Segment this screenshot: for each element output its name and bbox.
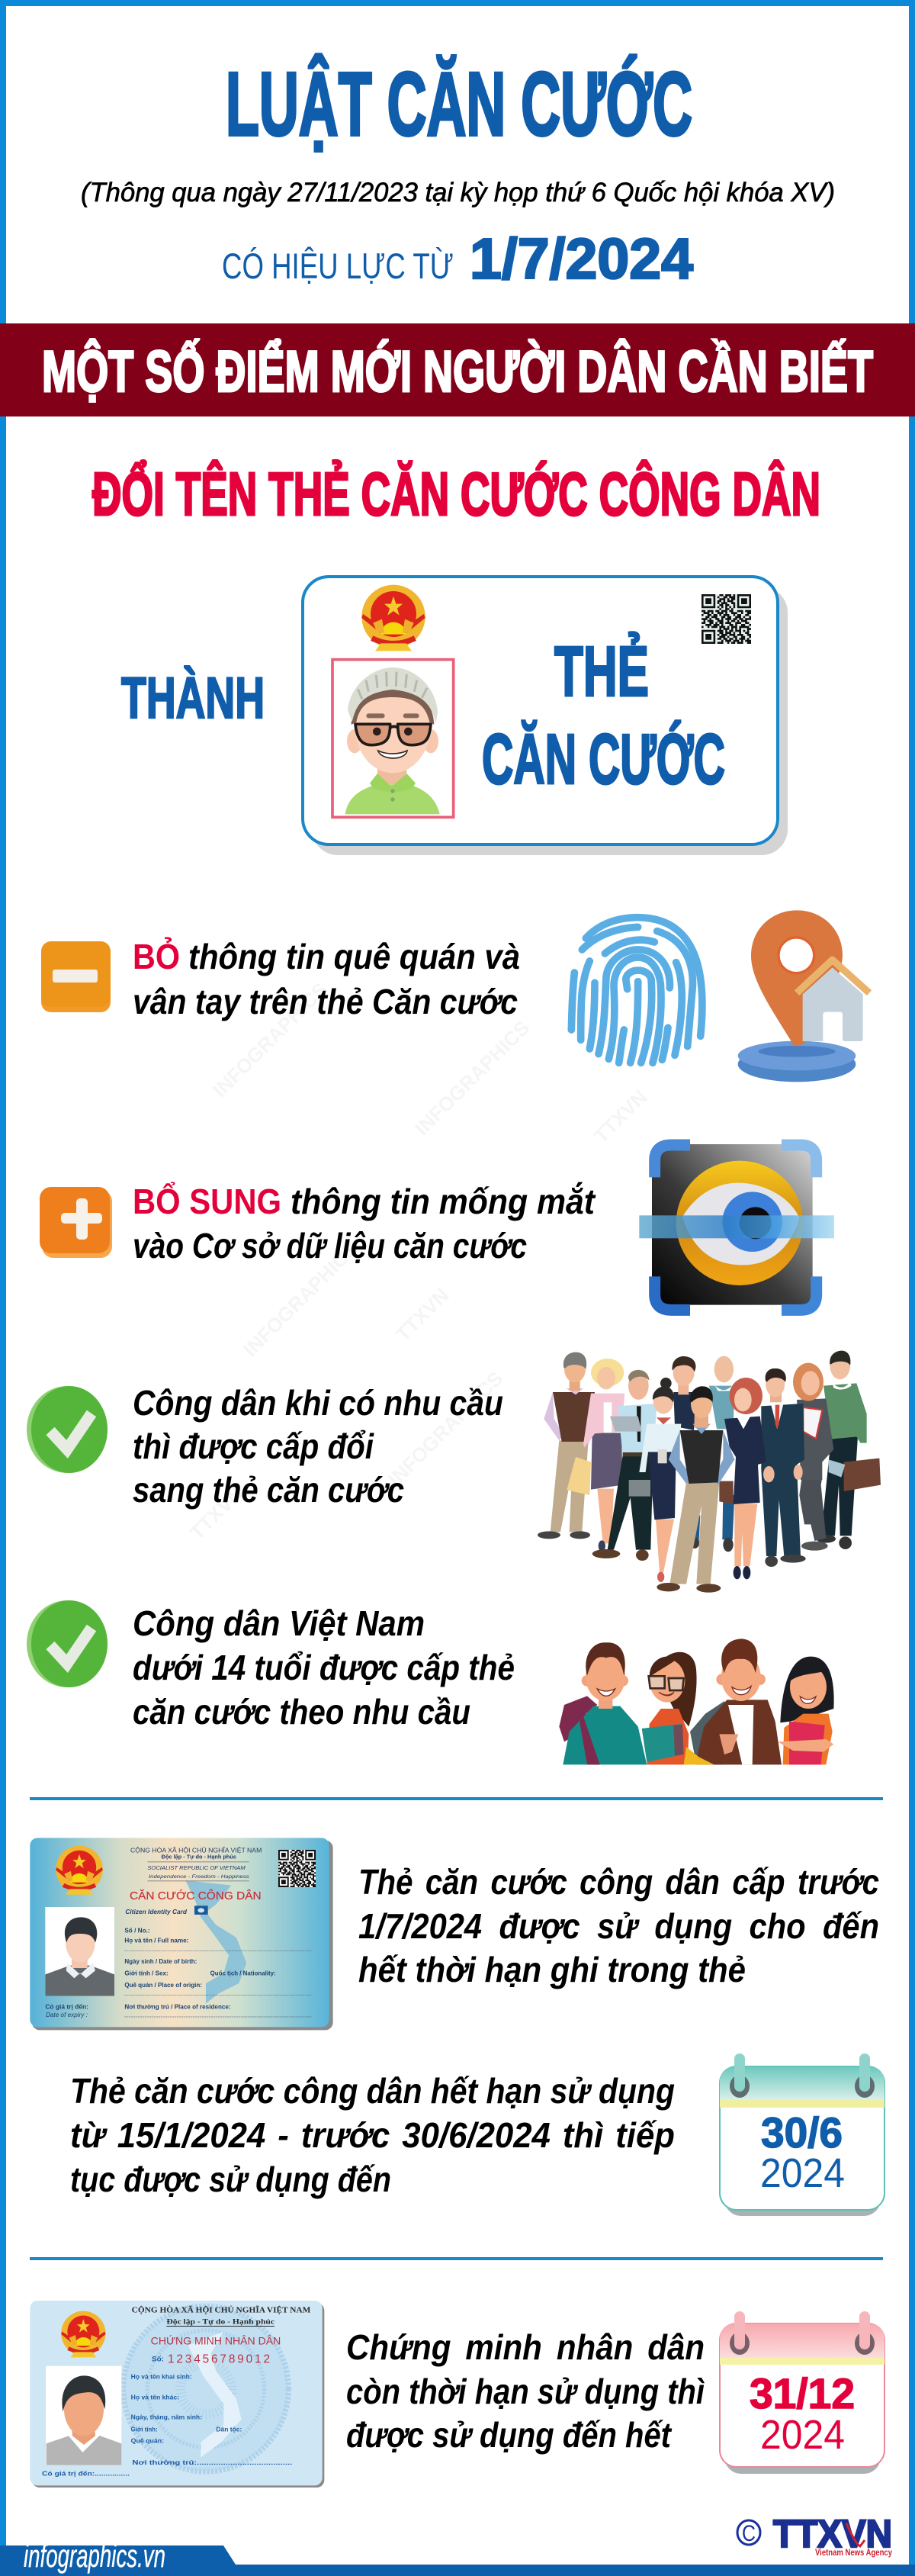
text: thông tin quê quán và: [188, 937, 520, 976]
image: people's ID card: [30, 2301, 324, 2488]
image: citizen ID card: Quốc tịch / Nationality:: [210, 1970, 276, 1976]
icon: fingerprint: [571, 918, 702, 1063]
icon: calendar 31/12/2024: [720, 2311, 884, 2474]
text: TTXVN: [185, 1482, 248, 1544]
student: girl with book: [778, 1657, 834, 1764]
footer: infographics.vn: [24, 2538, 165, 2574]
text: hết thời hạn ghi trong thẻ: [358, 1950, 746, 1989]
icon: calendar 30/6/2024: [720, 2053, 884, 2216]
text: được sử dụng đến hết: [346, 2415, 672, 2455]
icon: check: [27, 1600, 108, 1687]
logo: TTXVN: C: [742, 2521, 756, 2546]
icon: iris scan: [639, 1144, 834, 1310]
text: Chứng minh nhân dân: [346, 2327, 705, 2367]
person: suit man: [761, 1368, 806, 1567]
image: citizen ID card: Họ và tên / Full name:: [124, 1938, 188, 1944]
icon: plus: [40, 1187, 112, 1258]
text: [70, 2071, 675, 2199]
image: people's ID card: Họ và tên khai sinh:: [131, 2373, 192, 2380]
text: thông tin mống mắt: [291, 1182, 596, 1221]
footer: [0, 2538, 915, 2576]
effective date: 1/7/2024: [470, 227, 693, 291]
panel: new ID card: [303, 577, 788, 855]
image: people's ID card: Quê quán:: [131, 2438, 164, 2445]
image: citizen ID card: Ngày sinh / Date of birth:: [124, 1958, 197, 1965]
text: [133, 1603, 515, 1732]
card text: CĂN CƯỚC: [482, 719, 725, 799]
panel: citizen ID validity: [30, 1838, 879, 2030]
logo: TTXVN: [737, 2512, 892, 2558]
text: [358, 1862, 879, 1989]
text: [133, 1182, 596, 1265]
image: citizen ID card: Date of expiry :: [46, 2012, 88, 2018]
icon: QR code: [702, 594, 751, 644]
text: INFOGRAPHICS: [384, 1367, 507, 1491]
icon: national emblem: [361, 585, 425, 651]
icon: calendar 31/12/2024: 31/12: [750, 2369, 855, 2417]
icon: calendar 30/6/2024: 2024: [760, 2150, 845, 2196]
image: people's ID card: 123456789012: [168, 2353, 270, 2366]
person: orange-haired woman: [793, 1363, 845, 1551]
person: blonde woman: [583, 1359, 624, 1552]
divider: [30, 1797, 883, 1800]
image: people's ID card: Ngày, tháng, năm sinh:: [131, 2414, 202, 2421]
illustration: crowd of people: [538, 1351, 881, 1593]
student: boy with jacket: [684, 1639, 782, 1764]
label: thanh: THÀNH: [121, 666, 265, 731]
student: girl with glasses: [642, 1652, 697, 1764]
image: citizen ID card: SOCIALIST REPUBLIC OF VIETNAM: [147, 1864, 246, 1871]
item: add: [40, 1144, 834, 1310]
image: people's ID card: Dân tộc:: [216, 2426, 242, 2433]
person: woman with coffee: [629, 1378, 681, 1582]
text: INFOGRAPHICS: [208, 978, 332, 1101]
text: Công dân khi có nhu cầu: [133, 1383, 503, 1423]
image: citizen ID card: Independence - Freedom - Happiness: [149, 1874, 249, 1880]
item: children under 14: [27, 1600, 834, 1764]
person: short-haired woman: [673, 1356, 696, 1430]
person: vest man: [538, 1352, 600, 1539]
text: [346, 2327, 705, 2455]
image: citizen ID card: Nơi thường trú / Place of residence:: [124, 2003, 231, 2010]
icon: minus: [41, 941, 111, 1012]
person: man with tablet: [592, 1370, 657, 1561]
icon: calendar 31/12/2024: 2024: [760, 2412, 845, 2458]
image: citizen ID card: [30, 1838, 333, 2030]
effective date: CÓ HIỆU LỰC TỪ: [222, 246, 454, 286]
text: TTXVN: [391, 1284, 454, 1346]
text: vân tay trên thẻ Căn cước: [133, 982, 518, 1021]
card text: THẺ: [554, 632, 649, 711]
subtitle: (Thông qua ngày 27/11/2023 tại kỳ họp thứ 6 Quốc hội khóa XV): [81, 178, 835, 207]
image: citizen ID card: Có giá trị đến:: [45, 2003, 88, 2010]
panel: old ID validity: [30, 2301, 884, 2488]
person: briefcase man: [817, 1351, 881, 1549]
text: Thẻ căn cước công dân hết hạn sử dụng: [70, 2071, 675, 2111]
image: citizen ID card: Số / No.:: [124, 1927, 150, 1934]
text: còn thời hạn sử dụng thì: [346, 2372, 705, 2411]
text: tục được sử dụng đến: [70, 2160, 391, 2199]
image: people's ID card: Độc lập - Tự do - Hạnh phúc: [166, 2319, 274, 2327]
person: bald man: [689, 1356, 734, 1552]
image: citizen ID card: Giới tính / Sex:: [124, 1970, 169, 1976]
logo: TTXVN: Vietnam News Agency: [815, 2547, 892, 2558]
item: remove: [41, 910, 869, 1082]
student: boy with backpack: [559, 1642, 647, 1764]
image: citizen ID card: Citizen Identity Card: [125, 1908, 188, 1915]
text: [133, 1383, 503, 1510]
portrait: [332, 660, 454, 817]
image: people's ID card: Họ và tên khác:: [131, 2394, 179, 2401]
text: BỎ: [133, 937, 180, 976]
text: sang thẻ căn cước: [133, 1470, 404, 1510]
text: INFOGRAPHICS: [410, 1016, 534, 1140]
text: Công dân Việt Nam: [133, 1603, 425, 1643]
person: front man: [657, 1386, 734, 1593]
text: thì được cấp đổi: [133, 1426, 374, 1466]
text: từ 15/1/2024 - trước 30/6/2024 thì tiếp: [70, 2115, 675, 2155]
icon: check: [27, 1386, 108, 1473]
person: red-haired woman: [719, 1378, 766, 1579]
image: citizen ID card: CỘNG HÒA XÃ HỘI CHỦ NGHĨA VIỆT NAM: [130, 1845, 262, 1854]
card text: [482, 632, 725, 799]
image: people's ID card: Nơi thường trú:........................................: [132, 2459, 292, 2466]
image: citizen ID card: Độc lập - Tự do - Hạnh phúc: [162, 1855, 236, 1860]
icon: calendar 30/6/2024: 30/6: [761, 2108, 843, 2156]
image: people's ID card: CHỨNG MINH NHÂN DÂN: [151, 2334, 281, 2346]
image: people's ID card: Số:: [152, 2356, 164, 2363]
text: TTXVN: [589, 1085, 652, 1147]
text: INFOGRAPHICS: [239, 1237, 362, 1361]
text: [133, 937, 520, 1021]
image: people's ID card: Giới tính:: [131, 2426, 158, 2433]
item: citizens request: [27, 1351, 881, 1593]
text: vào Cơ sở dữ liệu căn cước: [133, 1226, 527, 1265]
effective date: [222, 227, 693, 291]
image: citizen ID card: CĂN CƯỚC CÔNG DÂN: [130, 1889, 262, 1902]
panel: expired cards extension: [70, 2053, 884, 2216]
text: dưới 14 tuổi được cấp thẻ: [133, 1648, 515, 1687]
divider: [30, 2257, 883, 2260]
icon: location and house: [738, 910, 869, 1082]
image: people's ID card: CỘNG HÒA XÃ HỘI CHỦ NGHĨA VIỆT NAM: [132, 2305, 311, 2315]
illustration: students: [559, 1639, 834, 1764]
logo: TTXVN: TTXVN: [773, 2512, 892, 2555]
text: căn cước theo nhu cầu: [133, 1692, 470, 1732]
image: citizen ID card: Quê quán / Place of origin:: [124, 1982, 202, 1989]
image: people's ID card: Có giá trị đến:................: [42, 2471, 130, 2478]
text: BỔ SUNG: [133, 1182, 281, 1221]
banner: [0, 323, 915, 416]
